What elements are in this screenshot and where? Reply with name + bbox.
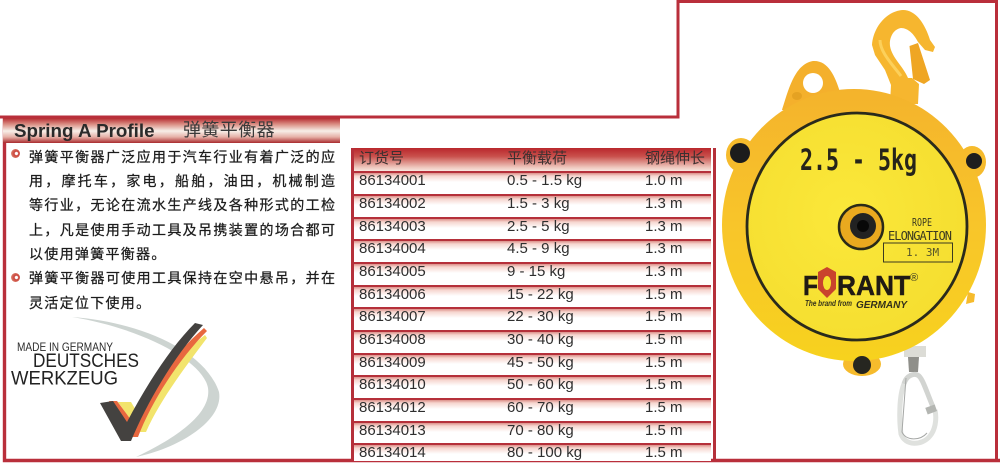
row 86134004: 1.3 m	[645, 240, 683, 257]
bullet two	[11, 273, 20, 282]
brand tagline	[805, 299, 908, 311]
balancer body	[722, 89, 986, 361]
table side borders	[351, 148, 716, 460]
row 86134005	[354, 262, 711, 285]
table header: 平衡载荷	[507, 150, 567, 167]
lifting hook	[872, 10, 935, 104]
paragraph two: 弹簧平衡器可使用工具保持在空中悬吊，并在	[29, 270, 335, 286]
row 86134002	[354, 194, 711, 217]
row 86134014: 80 - 100 kg	[507, 444, 582, 461]
row 86134008: 86134008	[359, 331, 426, 348]
logo swoosh	[72, 317, 219, 457]
row 86134001: 86134001	[359, 172, 426, 189]
row 86134009: 45 - 50 kg	[507, 354, 574, 371]
row 86134006: 1.5 m	[645, 286, 683, 303]
row 86134014	[354, 443, 711, 461]
row 86134008: 30 - 40 kg	[507, 331, 574, 348]
row 86134012	[354, 398, 711, 421]
paragraph one: 等行业，无论在流水生产线及各种形式的工检	[29, 197, 335, 213]
screw bottom	[853, 356, 871, 374]
row 86134001: 1.0 m	[645, 172, 683, 189]
row 86134006: 15 - 22 kg	[507, 286, 574, 303]
row 86134013	[354, 421, 711, 444]
logo check yellow	[118, 335, 207, 432]
made in germany logo	[11, 317, 220, 457]
row 86134008	[354, 330, 711, 353]
row 86134013: 86134013	[359, 422, 426, 439]
table header: 钢绳伸长	[645, 150, 705, 167]
centre hole	[839, 205, 883, 249]
row 86134003	[354, 217, 711, 240]
forant logo: RANT	[837, 270, 910, 301]
text block: description	[11, 149, 335, 311]
row 86134012: 60 - 70 kg	[507, 399, 574, 416]
row 86134001	[354, 171, 711, 194]
row 86134006: 86134006	[359, 286, 426, 303]
heading bar	[3, 118, 340, 143]
rope label: ROPE	[912, 216, 932, 229]
row 86134007: 22 - 30 kg	[507, 308, 574, 325]
logo check orange	[109, 328, 207, 437]
row 86134009: 1.5 m	[645, 354, 683, 371]
row 86134009	[354, 353, 711, 376]
body face	[747, 113, 967, 340]
forant logo: ®	[910, 272, 918, 284]
product illustration: spring balancer	[722, 10, 986, 446]
row 86134007	[354, 307, 711, 330]
logo check dark	[100, 323, 203, 441]
screw right	[966, 153, 982, 169]
row 86134008: 1.5 m	[645, 331, 683, 348]
forant logo	[803, 267, 918, 301]
paragraph one: 用，摩托车，家电，船舶，油田，机械制造	[29, 173, 335, 189]
row 86134013: 1.5 m	[645, 422, 683, 439]
table header	[354, 148, 711, 172]
logo text made in germany: MADE IN GERMANY	[17, 342, 113, 354]
forant logo: F	[803, 270, 818, 301]
elongation value box: 1. 3M	[906, 246, 939, 259]
bullet one	[11, 149, 20, 158]
row 86134010: 50 - 60 kg	[507, 376, 574, 393]
row 86134009: 86134009	[359, 354, 426, 371]
row 86134014: 1.5 m	[645, 444, 683, 461]
paragraph one: 上，凡是使用手动工具及吊携装置的场合都可	[29, 222, 335, 238]
logo text werkzeug: WERKZEUG	[11, 368, 118, 390]
row 86134002: 1.3 m	[645, 195, 683, 212]
row 86134010: 86134010	[359, 376, 426, 393]
heading chinese: 弹簧平衡器	[183, 120, 275, 140]
row 86134007: 1.5 m	[645, 308, 683, 325]
row 86134005: 86134005	[359, 263, 426, 280]
row 86134012: 1.5 m	[645, 399, 683, 416]
row 86134013: 70 - 80 kg	[507, 422, 574, 439]
row 86134010	[354, 375, 711, 398]
row 86134005: 9 - 15 kg	[507, 263, 565, 280]
row 86134004	[354, 239, 711, 262]
table header: 订货号	[359, 150, 404, 167]
row 86134010: 1.5 m	[645, 376, 683, 393]
logo text deutsches: DEUTSCHES	[33, 351, 139, 372]
row 86134007: 86134007	[359, 308, 426, 325]
row 86134001: 0.5 - 1.5 kg	[507, 172, 582, 189]
elongation label: ELONGATION	[888, 229, 952, 243]
screw ears	[726, 138, 986, 376]
carabiner clip	[900, 346, 937, 443]
row 86134005: 1.3 m	[645, 263, 683, 280]
row 86134012: 86134012	[359, 399, 426, 416]
elongation value box	[884, 243, 952, 262]
row 86134002: 86134002	[359, 195, 426, 212]
row 86134004: 4.5 - 9 kg	[507, 240, 570, 257]
row 86134014: 86134014	[359, 444, 426, 461]
paragraph two: 灵活定位下使用。	[29, 295, 151, 311]
brand tagline: The brand from	[805, 299, 852, 308]
paragraph one: 以使用弹簧平衡器。	[29, 246, 167, 262]
brand tagline: GERMANY	[856, 299, 908, 311]
heading english: Spring A Profile	[14, 120, 155, 141]
paragraph one: 弹簧平衡器广泛应用于汽车行业有着广泛的应	[29, 149, 335, 165]
paragraph two	[29, 270, 335, 311]
row 86134003: 86134003	[359, 218, 426, 235]
row 86134004: 86134004	[359, 240, 426, 257]
row 86134003: 1.3 m	[645, 218, 683, 235]
mounting lug	[782, 61, 842, 110]
row 86134003: 2.5 - 5 kg	[507, 218, 570, 235]
capacity label: 2.5 - 5kg	[800, 143, 917, 177]
screw left	[730, 143, 750, 163]
paragraph one	[29, 149, 335, 262]
row 86134002: 1.5 - 3 kg	[507, 195, 570, 212]
row 86134006	[354, 285, 711, 308]
